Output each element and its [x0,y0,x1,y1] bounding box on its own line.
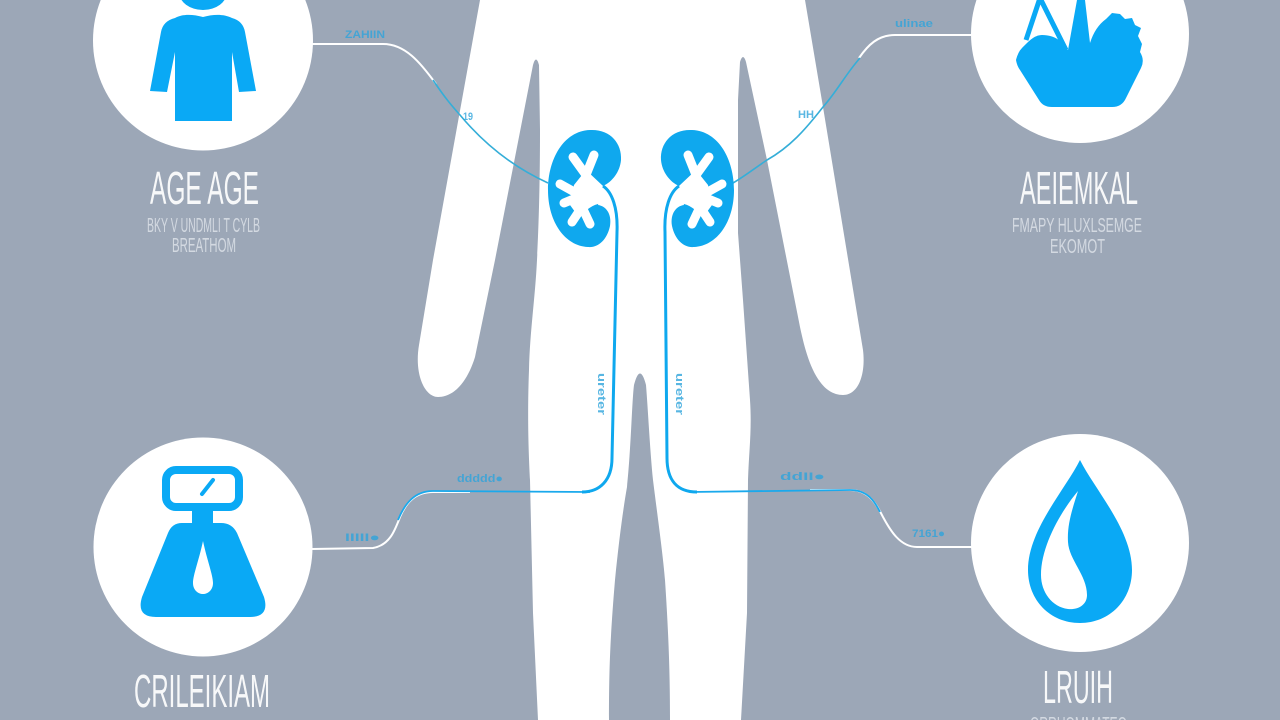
icon circle: scale [94,438,312,656]
description: age: BKY V UNDMLI T CYLB [147,215,260,237]
small label: top left body: 19 [463,111,473,123]
small label: top left line: ZAHIIN [345,29,385,41]
icon: water drop [1028,460,1132,623]
connector: bottom left [312,491,590,549]
kidney and ureter: left [548,130,621,492]
icon: scale [141,470,265,617]
small label: left ureter: ureter [595,373,607,416]
small label: top right line: ulinae [895,18,933,30]
heading: calcium: CRILEIKIAM [134,665,270,717]
small label: right ureter: ureter [673,373,685,416]
panel: animal, top right [971,0,1189,258]
description: animal [1012,215,1142,258]
description: animal: FMAPY HLUXLSEMGE [1012,215,1142,237]
kidney and ureter: right [661,130,734,492]
description: age [147,215,260,257]
heading: age: AGE AGE [150,162,259,214]
small label: bottom right lower: 7161● [912,528,945,540]
small label: bottom left lower: IIIII● [345,532,380,544]
connector: top right [733,35,972,183]
panel: liquid, bottom right [971,434,1189,720]
description: age: BREATHOM [172,235,236,257]
icon circle: age [93,0,313,150]
small label: bottom right upper: ddII● [780,471,825,483]
heading: liquid: LRUIH [1043,661,1113,713]
icon: basket [1016,0,1143,107]
icon circle: basket [971,0,1189,143]
heading: animal: AEIEMKAL [1020,162,1138,214]
icon: person [150,0,256,121]
connector: top left [312,44,548,183]
panel: calcium, bottom left [94,438,312,717]
body silhouette [418,0,864,720]
panel: age, top left [93,0,313,257]
small label: top right body: HH [798,109,814,121]
icon circle: water drop [971,434,1189,652]
connector: bottom right [690,490,972,547]
description: animal: EKOMOT [1050,236,1105,258]
small label: bottom left upper: ddddd● [457,473,503,485]
